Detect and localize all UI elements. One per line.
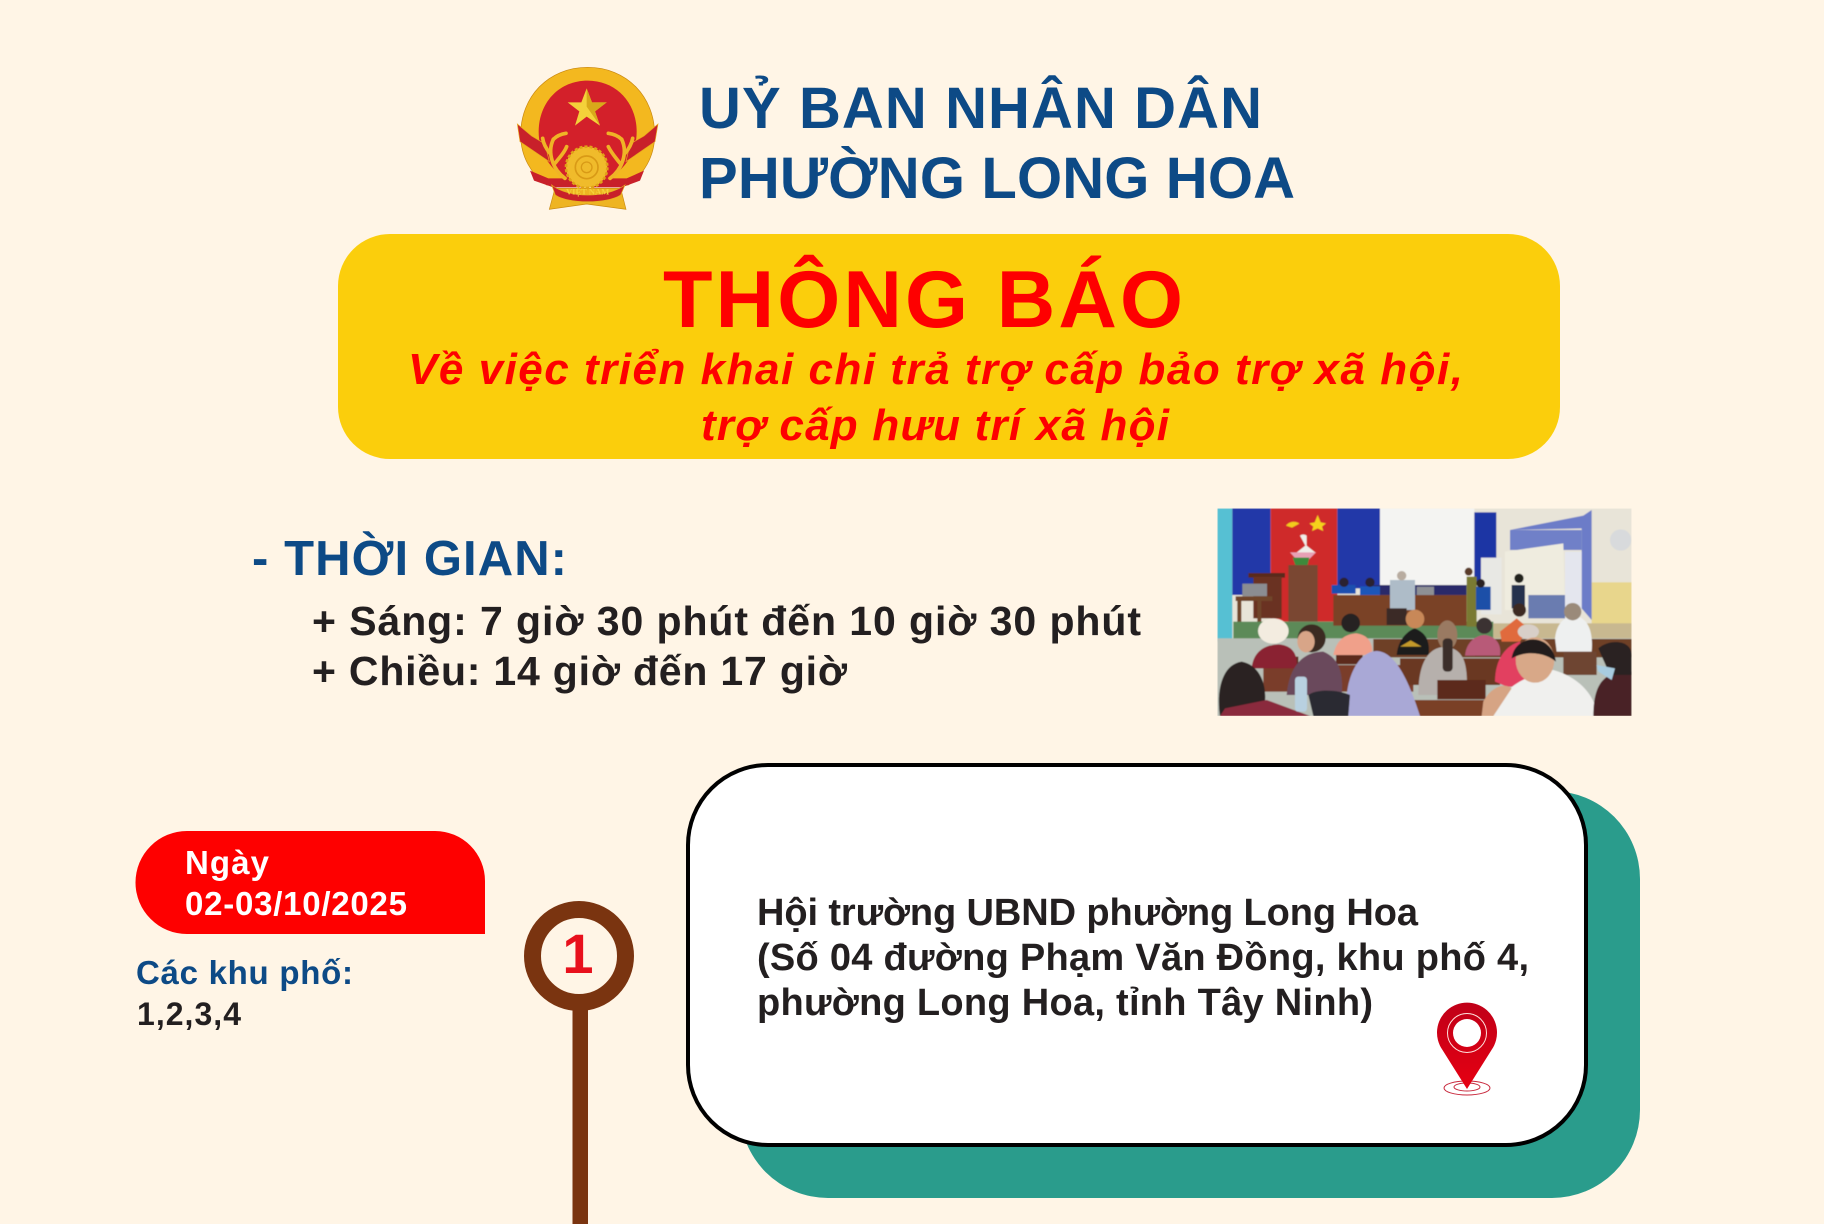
subtitle: announcement topic: trợ cấp hưu trí xã hội [701, 401, 1170, 450]
card shadow: teal backing [740, 791, 1640, 1198]
photo: people at the payment hall [1217, 508, 1632, 716]
panel: announcement banner [338, 234, 1560, 459]
subtitle: announcement topic: Về việc triển khai chi trả trợ cấp bảo trợ xã hội, [408, 345, 1463, 394]
text block: venue address: (Số 04 đường Phạm Văn Đồng, khu phố 4, [757, 937, 1529, 979]
text: date: Ngày [185, 844, 270, 881]
heading: issuing authority: UỶ BAN NHÂN DÂN [699, 76, 1262, 141]
icon: national emblem of Vietnam: VIỆT NAM [566, 187, 609, 197]
subtitle: announcement topic [408, 345, 1463, 450]
text block: working hours [312, 598, 1141, 694]
heading: issuing authority [699, 76, 1295, 211]
text: date [185, 844, 407, 922]
infographic canvas [136, 67, 1640, 1224]
icon: national emblem of Vietnam [517, 67, 658, 209]
heading: time: - THỜI GIAN: [252, 531, 567, 586]
text block: neighbourhoods: Các khu phố: [136, 954, 353, 991]
text block: working hours: + Chiều: 14 giờ đến 17 giờ [312, 648, 848, 694]
icon: location pin [1437, 1003, 1497, 1095]
heading: issuing authority: PHƯỜNG LONG HOA [699, 146, 1295, 211]
text: date: 02-03/10/2025 [185, 885, 407, 922]
panel: location card [688, 765, 1640, 1198]
card body: venue [688, 765, 1586, 1145]
text block: venue address: phường Long Hoa, tỉnh Tây Ninh) [757, 982, 1373, 1024]
text block: venue address [757, 892, 1529, 1024]
audience [1252, 644, 1297, 668]
text block: venue address: Hội trường UBND phường Long Hoa [757, 892, 1419, 934]
text block: working hours: + Sáng: 7 giờ 30 phút đến 10 giờ 30 phút [312, 598, 1141, 644]
text block: neighbourhoods: 1,2,3,4 [137, 996, 241, 1032]
panel: date tag [136, 831, 485, 934]
timeline marker: step 1: 1 [562, 922, 594, 985]
timeline marker: step 1 [532, 910, 626, 1224]
title: announcement: THÔNG BÁO [663, 254, 1183, 345]
text block: neighbourhoods [136, 954, 353, 1032]
